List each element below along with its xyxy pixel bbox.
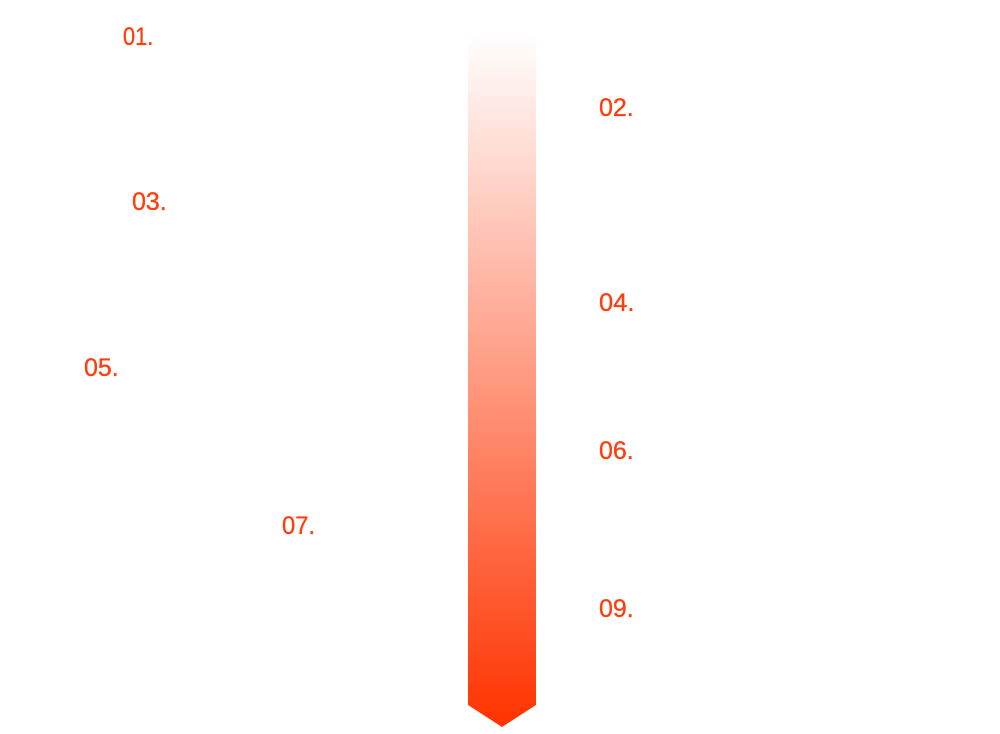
number 05: 05.	[84, 354, 119, 382]
number 09: 09.	[599, 595, 634, 623]
number 03: 03.	[132, 188, 167, 216]
number 02: 02.	[599, 94, 634, 122]
number 04: 04.	[599, 289, 634, 317]
number 01: 01.	[123, 23, 153, 51]
number 07: 07.	[282, 512, 315, 540]
number 06: 06.	[599, 437, 634, 465]
